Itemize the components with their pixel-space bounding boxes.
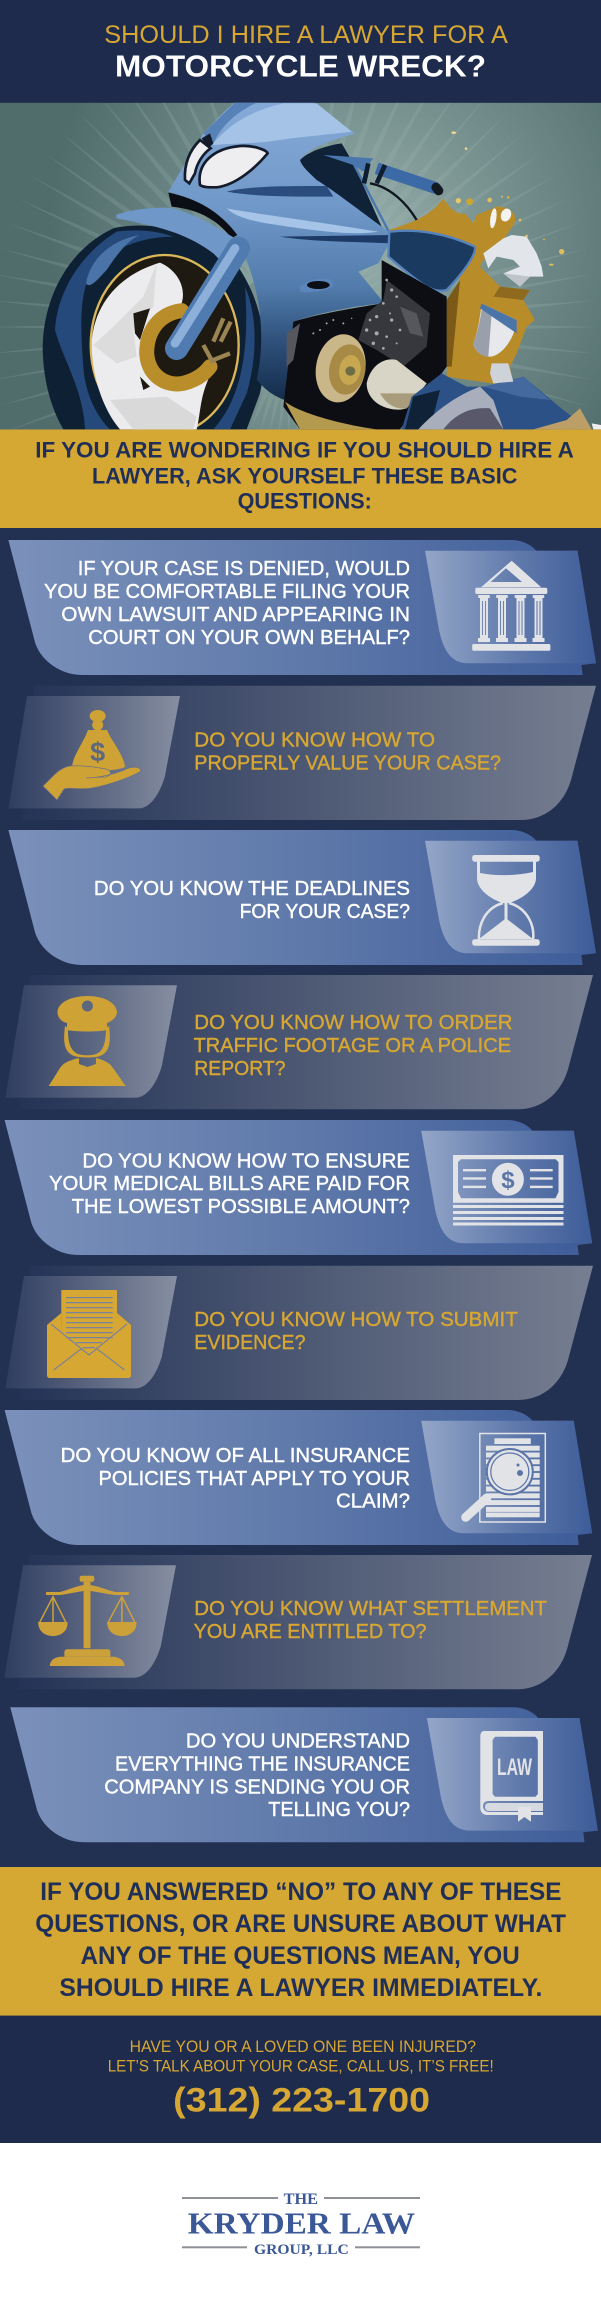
title line 2: MOTORCYCLE WRECK? xyxy=(115,48,486,84)
question 1 text: YOU BE COMFORTABLE FILING YOUR xyxy=(44,581,410,603)
icon: scales of justice xyxy=(38,1576,136,1666)
question 1 text: IF YOUR CASE IS DENIED, WOULD xyxy=(78,558,410,580)
icon: money bag on hand: $ xyxy=(90,737,105,767)
question 5 text: THE LOWEST POSSIBLE AMOUNT? xyxy=(72,1196,410,1218)
body fairing xyxy=(168,103,389,400)
icon: law book xyxy=(480,1731,543,1822)
panel: question 3 xyxy=(8,830,596,965)
phone number: (312) 223-1700 xyxy=(173,2082,430,2120)
windscreen interior xyxy=(300,143,382,227)
question 3 text: DO YOU KNOW THE DEADLINES xyxy=(94,878,410,900)
question 2 text xyxy=(194,730,501,775)
engine disc xyxy=(316,334,366,402)
panel: question 4 xyxy=(5,975,593,1109)
question 2 text: PROPERLY VALUE YOUR CASE? xyxy=(194,753,501,775)
icon: police officer xyxy=(49,996,126,1086)
question 4 text: DO YOU KNOW HOW TO ORDER xyxy=(194,1012,513,1034)
question 8 text: YOU ARE ENTITLED TO? xyxy=(194,1621,427,1643)
icon: banknotes: $ xyxy=(501,1167,515,1194)
question 1 text xyxy=(44,558,410,649)
brake caliper xyxy=(147,311,210,384)
question 6 text: DO YOU KNOW HOW TO SUBMIT xyxy=(194,1309,518,1331)
question 7 text: POLICIES THAT APPLY TO YOUR xyxy=(98,1468,410,1490)
intro banner: IF YOU ARE WONDERING IF YOU SHOULD HIRE A xyxy=(35,438,574,463)
handlebar xyxy=(323,155,373,172)
broken fairing pieces xyxy=(402,373,577,429)
conclusion banner: SHOULD HIRE A LAWYER IMMEDIATELY. xyxy=(59,1974,542,2002)
question 5 text: YOUR MEDICAL BILLS ARE PAID FOR xyxy=(49,1173,410,1195)
drops xyxy=(456,198,461,203)
white shards xyxy=(483,235,543,287)
icon: money bag on hand xyxy=(43,710,141,800)
panel: question 9 xyxy=(10,1707,598,1842)
panel: question 1 xyxy=(8,540,596,675)
question 8 text: DO YOU KNOW WHAT SETTLEMENT xyxy=(194,1598,547,1620)
conclusion banner: ANY OF THE QUESTIONS MEAN, YOU xyxy=(80,1942,520,1970)
call to action: LET’S TALK ABOUT YOUR CASE, CALL US, IT’S FREE! xyxy=(108,2057,494,2075)
question 4 text xyxy=(194,1012,512,1080)
fuel tank xyxy=(388,231,475,291)
intro banner: LAWYER, ASK YOURSELF THESE BASIC xyxy=(92,463,518,488)
fender xyxy=(116,208,235,260)
question 7 text: CLAIM? xyxy=(336,1490,410,1512)
question 9 text: EVERYTHING THE INSURANCE xyxy=(115,1754,410,1776)
gold crash burst xyxy=(388,198,535,387)
rim xyxy=(91,255,239,435)
question 9 text: DO YOU UNDERSTAND xyxy=(186,1731,410,1753)
exhaust xyxy=(367,359,427,410)
question 9 text xyxy=(104,1731,410,1821)
fork xyxy=(177,248,238,348)
question 3 text: FOR YOUR CASE? xyxy=(240,901,410,923)
headlights xyxy=(202,133,213,148)
panel: question 5 xyxy=(5,1120,592,1255)
question 6 text: EVIDENCE? xyxy=(194,1332,306,1354)
silver panel xyxy=(473,303,517,357)
question 9 text: COMPANY IS SENDING YOU OR xyxy=(104,1777,410,1799)
question 7 text: DO YOU KNOW OF ALL INSURANCE xyxy=(61,1445,410,1467)
question 5 text: DO YOU KNOW HOW TO ENSURE xyxy=(82,1151,410,1173)
illustration: crashed motorcycle xyxy=(0,102,601,430)
intro banner: QUESTIONS: xyxy=(238,489,372,514)
conclusion banner: QUESTIONS, OR ARE UNSURE ABOUT WHAT xyxy=(35,1910,566,1938)
panel: question 8 xyxy=(4,1555,592,1689)
panel: question 2 xyxy=(8,686,596,820)
header panel xyxy=(0,0,601,103)
footer logo: GROUP, LLC xyxy=(254,2242,349,2258)
conclusion banner xyxy=(0,1867,601,2016)
question 4 text: TRAFFIC FOOTAGE OR A POLICE xyxy=(194,1035,511,1057)
call to action xyxy=(0,2016,601,2143)
intro banner xyxy=(0,430,601,528)
question 5 text xyxy=(49,1151,410,1218)
question 6 text xyxy=(194,1309,518,1354)
title line 1: SHOULD I HIRE A LAWYER FOR A xyxy=(104,21,508,49)
footer logo: THE xyxy=(284,2191,318,2208)
question 4 text: REPORT? xyxy=(194,1058,286,1080)
panel: question 7 xyxy=(5,1410,592,1545)
footer logo xyxy=(0,2143,601,2300)
conclusion banner: IF YOU ANSWERED “NO” TO ANY OF THESE xyxy=(40,1878,561,1906)
icon: law book: LAW xyxy=(497,1754,532,1781)
icon: hourglass xyxy=(472,855,540,946)
icon: envelope with letter xyxy=(47,1290,131,1378)
question 1 text: OWN LAWSUIT AND APPEARING IN xyxy=(61,604,410,626)
panel: question 6 xyxy=(5,1266,593,1400)
question 8 text xyxy=(194,1598,547,1643)
question 9 text: TELLING YOU? xyxy=(268,1799,410,1821)
icon: document and magnifying glass xyxy=(466,1434,545,1522)
question 7 text xyxy=(61,1445,410,1512)
question 2 text: DO YOU KNOW HOW TO xyxy=(194,730,435,752)
footer logo: KRYDER LAW xyxy=(188,2205,415,2240)
icon: courthouse xyxy=(472,561,550,651)
engine xyxy=(283,260,447,429)
question 3 text xyxy=(94,878,410,923)
call to action: HAVE YOU OR A LOVED ONE BEEN INJURED? xyxy=(130,2038,476,2056)
tire xyxy=(43,226,264,429)
question 1 text: COURT ON YOUR OWN BEHALF? xyxy=(88,627,410,649)
icon: banknotes xyxy=(453,1155,564,1226)
